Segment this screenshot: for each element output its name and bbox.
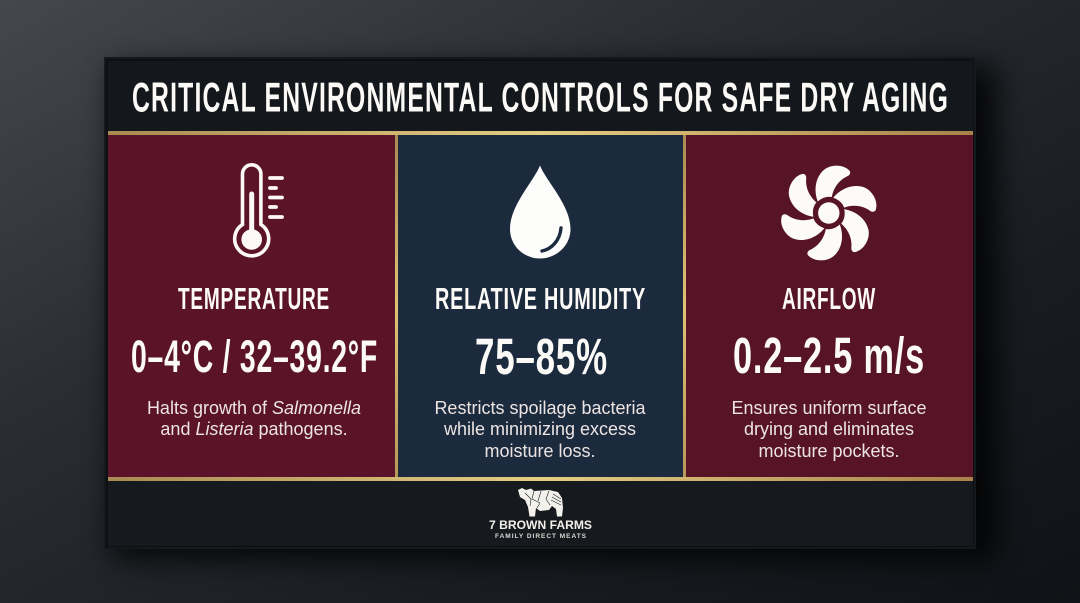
icon: water drop bbox=[510, 166, 570, 258]
panel: relative humidity bbox=[398, 135, 683, 477]
value: humidity range: 75–85% bbox=[475, 328, 608, 385]
frame shadow bbox=[112, 66, 997, 560]
panel: airflow bbox=[686, 135, 973, 477]
logo: 7 Brown Farms bbox=[489, 488, 592, 540]
icon: fan bbox=[777, 166, 881, 260]
text: humidity description: while minimizing excess bbox=[443, 419, 636, 439]
text: temperature description: and Listeria pathogens. bbox=[160, 419, 348, 439]
panel: temperature bbox=[108, 135, 395, 477]
text: airflow description: drying and eliminates bbox=[744, 419, 914, 439]
gold column dividers bbox=[395, 135, 686, 477]
value: airflow range: 0.2–2.5 m/s bbox=[733, 327, 925, 384]
header band bbox=[108, 61, 973, 131]
heading: airflow: AIRFLOW bbox=[782, 281, 876, 316]
text: temperature description bbox=[147, 398, 361, 439]
icon: cow bbox=[518, 488, 563, 516]
brand name: 7 BROWN FARMS bbox=[489, 520, 592, 532]
heading: temperature: TEMPERATURE bbox=[178, 281, 330, 316]
text: airflow description: moisture pockets. bbox=[758, 441, 900, 461]
heading: relative humidity: RELATIVE HUMIDITY bbox=[435, 281, 646, 316]
value: temperature range: 0–4°C / 32–39.2°F bbox=[131, 331, 378, 382]
footer band bbox=[108, 481, 973, 546]
display frame bbox=[104, 57, 976, 549]
text: humidity description bbox=[434, 398, 647, 461]
text: airflow description: Ensures uniform surface bbox=[731, 398, 927, 418]
text: temperature description: Halts growth of Salmonella bbox=[147, 398, 361, 418]
text: airflow description bbox=[731, 398, 927, 461]
gold rule top bbox=[108, 131, 973, 135]
gold rule bottom bbox=[108, 477, 973, 481]
text: humidity description: Restricts spoilage bacteria bbox=[434, 398, 647, 418]
icon: thermometer bbox=[235, 165, 282, 256]
text: humidity description: moisture loss. bbox=[484, 441, 596, 461]
brand tagline: FAMILY DIRECT MEATS bbox=[495, 533, 587, 540]
